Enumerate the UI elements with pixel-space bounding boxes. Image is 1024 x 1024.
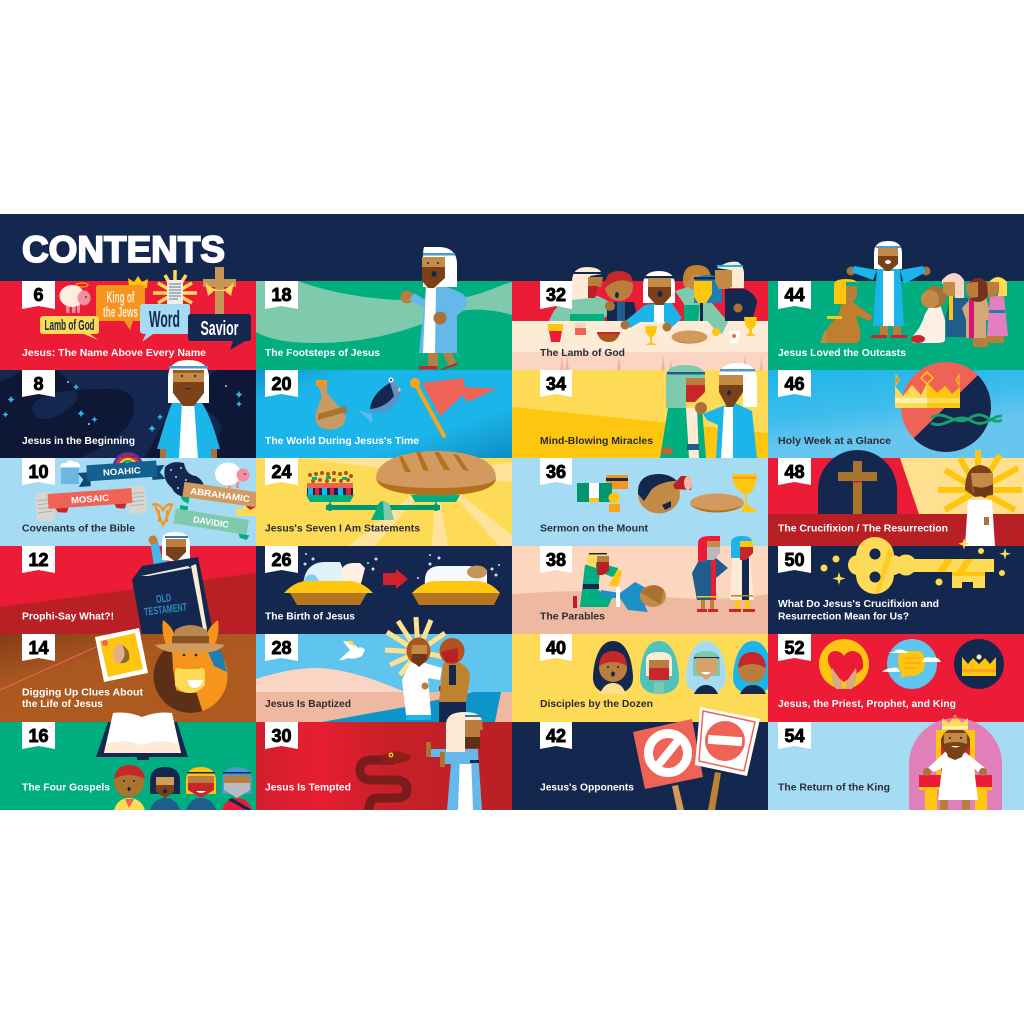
caption: Jesus Is Tempted (265, 782, 351, 794)
sun rays (300, 458, 512, 546)
arrow (383, 569, 408, 589)
page number badge (265, 370, 298, 397)
page number badge (778, 370, 811, 397)
icon: flag on pole (410, 378, 497, 436)
speech bubble: word: Word (149, 306, 180, 332)
page number badge (778, 634, 811, 661)
caption: Jesus Loved the Outcasts (778, 347, 906, 359)
icon: rain cloud (60, 460, 80, 484)
disciples at the table (549, 262, 757, 336)
page number badge: 32 (546, 285, 566, 305)
icon: bread (690, 494, 744, 512)
page number badge (22, 281, 55, 309)
page number badge (22, 370, 55, 397)
speech bubble: savior: Savior (200, 318, 239, 340)
photo pinned (95, 628, 148, 682)
caption: Jesus, the Priest, Prophet, and King (778, 698, 956, 710)
river (322, 692, 501, 722)
risen Jesus with rays (938, 450, 1022, 546)
icon: heart in hands (819, 639, 869, 689)
icon: sheep (215, 462, 250, 488)
page number badge (265, 722, 298, 749)
page number badge (778, 722, 811, 749)
page number badge: 10 (28, 462, 49, 482)
panel: The Birth of Jesus (256, 546, 512, 634)
title: CONTENTS (22, 228, 225, 270)
panel: Disciples by the Dozen (512, 634, 772, 722)
page number badge: 26 (271, 550, 292, 570)
panel: The Footsteps of Jesus (256, 247, 512, 370)
panel: Prophi-Say What?! (0, 532, 256, 634)
caption: Prophi-Say What?! (22, 610, 114, 622)
page number badge (265, 546, 298, 573)
panel: The Crucifixion / The Resurrection (768, 450, 1024, 546)
page number badge: 36 (546, 462, 566, 482)
figure: Jesus (402, 638, 442, 720)
icon: coins (608, 492, 620, 512)
panel: Holy Week at a Glance (768, 362, 1024, 460)
figure: enthroned Jesus (923, 728, 987, 810)
banner: Abrahamic (180, 482, 263, 514)
panel: Mind-Blowing Miracles (512, 363, 768, 458)
caption: Jesus's Seven I Am Statements (265, 522, 420, 534)
caption: The Lamb of God (540, 347, 625, 359)
page number badge (265, 458, 298, 485)
icon: cash (577, 483, 612, 502)
caption: Jesus's Opponents (540, 782, 634, 794)
icon: clay jar (315, 380, 347, 430)
portrait: teal egg (640, 641, 679, 694)
right group (683, 266, 711, 294)
portrait: Mark (150, 767, 180, 810)
sign: prohibition coral (633, 719, 703, 789)
page number badge (540, 370, 572, 397)
portrait: navy egg (593, 641, 633, 694)
left manger with sheep (284, 562, 373, 605)
page number badge (22, 634, 55, 661)
page number badge: 40 (546, 638, 566, 658)
banner: Abrahamic: ABRAHAMIC (190, 486, 251, 504)
page number badge: 38 (546, 550, 566, 570)
page number badge: 30 (271, 726, 292, 746)
page number badge (22, 722, 55, 749)
header band (0, 214, 1024, 281)
page number badge (540, 281, 572, 309)
panel: Jesus in the Beginning (0, 360, 256, 458)
page number badge: 16 (28, 726, 49, 746)
icon: serpent (360, 751, 411, 810)
caption: Mind-Blowing Miracles (540, 435, 653, 447)
caption: The World During Jesus's Time (265, 435, 419, 447)
icon: cross with cloth (203, 267, 236, 317)
icon: lyre (152, 504, 173, 525)
portrait: John (222, 767, 252, 810)
caption (778, 598, 939, 622)
page number badge (540, 634, 572, 661)
shadow band (512, 407, 768, 458)
page number badge: 24 (271, 462, 292, 482)
icon: profile head (638, 474, 680, 514)
icon: speech bubble in sky (882, 639, 941, 689)
page number badge (265, 281, 298, 309)
icon: small crown (236, 505, 256, 516)
tablecloth folds (560, 355, 763, 370)
figure: Jesus (426, 712, 483, 810)
page number badge (22, 458, 55, 485)
figure: prophet in book (148, 532, 196, 574)
icon: crown (942, 715, 968, 730)
figure: three onlookers (942, 273, 1008, 347)
panel: The World During Jesus's Time (256, 370, 512, 458)
ground (512, 591, 768, 634)
panel: Covenants of the Bible (0, 454, 263, 546)
page number badge: 54 (784, 726, 805, 746)
page number badge (22, 546, 55, 573)
page number badge: 52 (784, 638, 805, 658)
icon: stone tablets right (127, 485, 147, 514)
right manger with baby (412, 566, 500, 605)
caption: The Crucifixion / The Resurrection (778, 522, 948, 534)
string to photo (0, 643, 105, 690)
caption: What Do Jesus's Crucifixion and (778, 598, 939, 610)
page number badge: 34 (546, 374, 566, 394)
figure: disciple in green (660, 365, 706, 458)
caption: Resurrection Mean for Us? (778, 610, 909, 622)
icon: old testament book (132, 557, 212, 634)
speech bubble: lamb of god: Lamb of God (44, 317, 94, 334)
icon: glowing scroll (153, 270, 197, 307)
page number badge (778, 458, 811, 485)
stars (304, 553, 500, 579)
caption: The Parables (540, 610, 605, 622)
banner: Noahic (77, 460, 166, 487)
banner: Davidic: DAVIDIC (192, 514, 230, 530)
figure: Jesus with arms open (846, 241, 930, 338)
figure: seated child (911, 286, 946, 343)
caption: Digging Up Clues About (22, 686, 143, 698)
speech bubble: lamb of god (40, 316, 99, 340)
figure: wounded man (601, 582, 666, 612)
sand dune (256, 668, 405, 692)
icon: rainbow (114, 454, 142, 468)
page number badge: 42 (546, 726, 566, 746)
page number badge (540, 546, 572, 573)
panel: The Parables (512, 536, 768, 634)
icon: old testament book: OLD (155, 592, 172, 606)
figure: priest (692, 536, 728, 612)
banner: Noahic: NOAHIC (103, 465, 142, 478)
caption: Sermon on the Mount (540, 522, 648, 534)
page number badge (540, 458, 572, 485)
page number badge (778, 546, 811, 573)
page number badge: 44 (784, 285, 805, 305)
stars (2, 384, 242, 432)
panel: Jesus Is Tempted (256, 712, 512, 810)
page number badge: 28 (271, 638, 292, 658)
icon: dove (339, 641, 365, 660)
icon: crown (128, 276, 148, 288)
icon: stone tablets left (34, 491, 55, 522)
pink arch (909, 718, 1002, 810)
caption: The Return of the King (778, 782, 890, 794)
sign: no-entry white (695, 707, 760, 776)
figure: levite (729, 536, 755, 612)
page number badge (778, 281, 811, 309)
page number badge: 8 (33, 374, 44, 394)
panel: Sermon on the Mount (512, 458, 768, 546)
split circle (901, 362, 991, 452)
banner: Mosaic (48, 488, 133, 514)
protest sign poles (672, 772, 721, 810)
page number badge: 20 (271, 374, 292, 394)
page number badge: 14 (28, 638, 49, 658)
caption (22, 686, 143, 710)
caption: the Life of Jesus (22, 698, 103, 710)
icon: lamb with halo (60, 283, 90, 313)
panel: Jesus's Seven I Am Statements (256, 451, 512, 546)
figure: kneeling Samaritan (573, 552, 622, 608)
page number badge (265, 634, 298, 661)
caption: Jesus in the Beginning (22, 435, 135, 447)
icon: old testament book: TESTAMENT (144, 601, 188, 619)
panel: Jesus, the Priest, Prophet, and King (768, 634, 1024, 722)
speech bubble: savior (188, 314, 251, 350)
panel: The Lamb of God (512, 262, 768, 370)
icon: crown of thorns (931, 415, 1002, 425)
panel: The Four Gospels (0, 712, 256, 810)
contents page spread (0, 214, 1024, 810)
speech bubble: king of the jews (96, 285, 145, 330)
page number badge (540, 722, 572, 749)
speech bubble: king of the jews: the Jews (103, 304, 138, 321)
icon: open bible (96, 712, 188, 760)
caption: The Birth of Jesus (265, 610, 355, 622)
night sky shapes (0, 370, 217, 458)
icon: credit card (606, 475, 628, 489)
figure: walking Jesus (400, 247, 467, 370)
portrait: Luke (186, 767, 216, 810)
caption: Jesus: The Name Above Every Name (22, 347, 206, 359)
icon: meat (673, 476, 692, 490)
figure: kneeling woman (820, 279, 872, 343)
caption: Holy Week at a Glance (778, 435, 891, 447)
banner: Mosaic: MOSAIC (71, 493, 110, 505)
central figure (623, 302, 682, 328)
figure: John the Baptist (439, 638, 470, 722)
panel: Jesus: The Name Above Every Name (0, 267, 256, 370)
caption: The Four Gospels (22, 782, 110, 794)
page number badge: 12 (28, 550, 49, 570)
speech bubble: king of the jews: King of (106, 290, 135, 306)
rolling hill (256, 281, 512, 343)
caption: Jesus Is Baptized (265, 698, 351, 710)
icon: crown in navy circle (954, 639, 1004, 689)
page number badge: 50 (784, 550, 805, 570)
icon: fish (358, 378, 401, 423)
panel: Jesus Loved the Outcasts (768, 241, 1024, 370)
panel: Jesus's Opponents (512, 707, 768, 810)
key sparkles (820, 538, 1011, 586)
panel: What Do Jesus's Crucifixion and Resurrection Mean for Us? (768, 537, 1024, 634)
tomb dome with cross (818, 450, 897, 514)
icon: crown (895, 372, 960, 408)
icon: night sky blob (164, 462, 204, 498)
panel: The Return of the King (768, 715, 1024, 810)
caption: The Footsteps of Jesus (265, 347, 380, 359)
caption: Disciples by the Dozen (540, 698, 653, 710)
throne (919, 730, 992, 810)
halo rays (385, 617, 445, 675)
icon: goblet (732, 474, 757, 512)
figure: Jesus (157, 360, 220, 458)
page number badge: 6 (33, 285, 44, 305)
icon: donkey (150, 620, 228, 716)
banner: Davidic (173, 505, 252, 540)
page number badge: 48 (784, 462, 805, 482)
page number badge: 46 (784, 374, 805, 394)
portrait: light blue egg (686, 641, 726, 694)
scale and crowd (306, 451, 496, 520)
portrait: Matthew (114, 765, 145, 810)
figure: Jesus (695, 363, 757, 458)
icon: golden key (848, 537, 994, 594)
page number badge: 18 (271, 285, 292, 305)
caption: Covenants of the Bible (22, 522, 135, 534)
speech bubble: word (140, 304, 190, 342)
portrait: blue egg (733, 641, 772, 694)
table items (548, 317, 757, 345)
panel: Digging Up Clues About the Life of Jesus (0, 620, 256, 722)
panel: Jesus Is Baptized (256, 617, 512, 722)
